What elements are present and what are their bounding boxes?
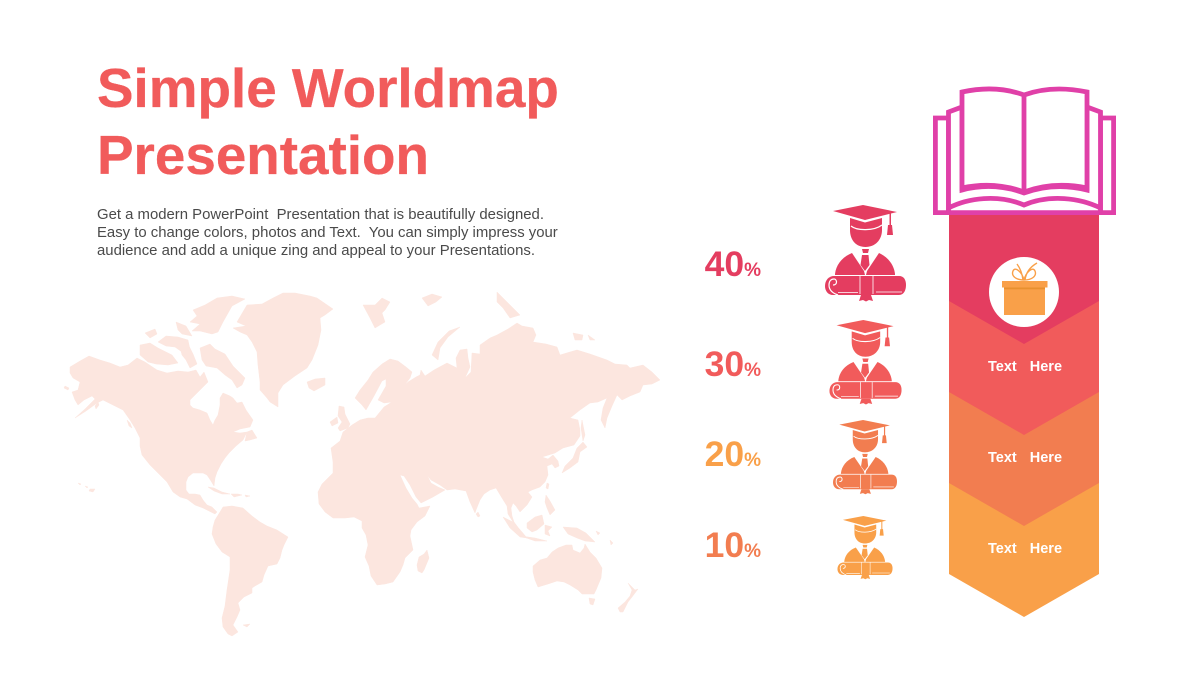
stat: 30%: 30%	[705, 344, 761, 384]
map: Greenland	[233, 293, 333, 407]
map: Alaska and Hawaii islands	[64, 386, 132, 492]
map: Japan and Sakhalin	[562, 420, 587, 473]
icon: open book	[935, 89, 1114, 213]
map: Canadian Arctic islands	[127, 296, 257, 441]
map: Iceland, Britain and Ireland	[307, 378, 350, 431]
map: Arctic Russia islands	[363, 292, 595, 360]
icon: graduate 40%	[825, 205, 906, 302]
title: Simple Worldmap Presentation	[97, 57, 559, 186]
ribbon segment: salmon	[949, 290, 1099, 435]
map: Australia	[533, 544, 602, 594]
stat: 40%: 40%	[705, 244, 761, 284]
map: New Zealand	[618, 583, 638, 612]
map: Eurasia and Africa	[318, 323, 660, 585]
icon: graduate 20%	[833, 420, 897, 494]
map: South America	[212, 506, 288, 636]
icon: gift in white circle	[989, 257, 1059, 327]
ribbon label 2: Text Here	[988, 450, 1062, 466]
map: Falkland and Tierra del Fuego	[243, 624, 250, 627]
world map	[64, 292, 660, 636]
ribbon label 3: Text Here	[988, 541, 1062, 557]
ribbon label 1: Text Here	[988, 359, 1062, 375]
ribbon segment: coral	[949, 380, 1099, 526]
stat: 10%: 10%	[705, 525, 761, 565]
icon: graduate 30%	[829, 320, 902, 404]
map: Tasmania	[589, 598, 595, 605]
ribbon segment: orange	[949, 470, 1099, 617]
map: North America	[70, 356, 253, 514]
map: Madagascar	[417, 550, 429, 573]
stat: 20%: 20%	[705, 434, 761, 474]
icon: graduate 10%	[837, 516, 893, 579]
map: Southeast Asia islands	[476, 483, 613, 545]
body text: Get a modern PowerPoint Presentation that is beautifully designed. Easy to change colors, photos and Text. You can simply impress your audience and add a unique zing and appeal to your Presentations.	[97, 207, 558, 259]
ribbon segment: crimson	[949, 214, 1099, 344]
ribbon: chevron banner	[949, 214, 1099, 617]
map: Caribbean	[208, 487, 250, 497]
